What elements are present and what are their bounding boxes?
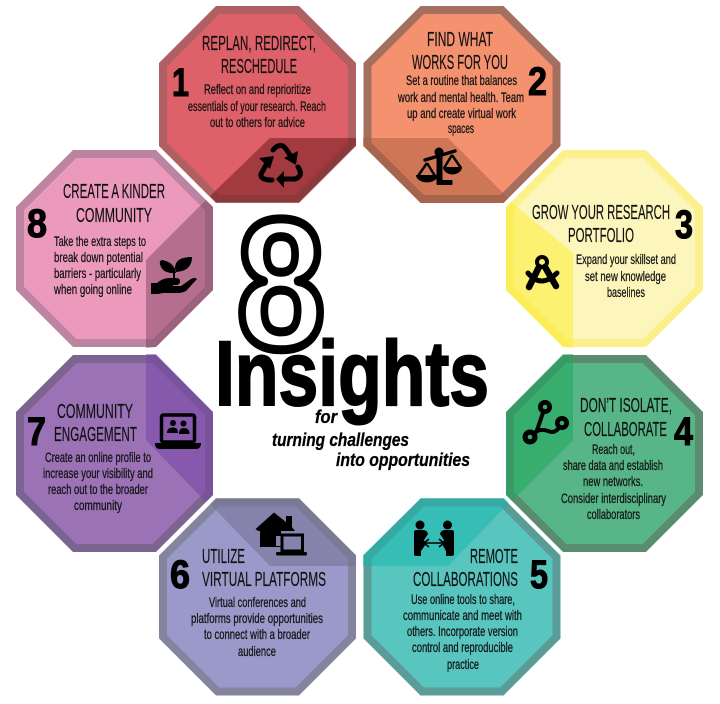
body text 8: Take the extra steps to (54, 233, 146, 249)
panel: 2 find what works for you (363, 6, 560, 203)
icon: recycle arrows (259, 146, 300, 188)
heading 2 (412, 29, 508, 74)
heading 2: WORKS FOR YOU (412, 52, 508, 74)
body text 8: break down potential (54, 249, 143, 265)
body text 7: increase your visibility and (43, 465, 153, 481)
body text 5: control and reproducible (412, 639, 513, 655)
icon: balance scales (416, 148, 462, 185)
subtitle: into opportunities (336, 450, 470, 470)
title: big outlined 8: 8 (237, 182, 325, 388)
body text 5: Use online tools to share, (411, 591, 515, 607)
icon: laptop with people (155, 415, 201, 449)
icon: drawing compass (528, 257, 557, 287)
heading 6: UTILIZE (202, 546, 245, 568)
heading 7: COMMUNITY (57, 401, 133, 423)
heading 4 (580, 395, 672, 441)
body text 6: Virtual conferences and (209, 594, 306, 610)
body text 2: work and mental health. Team (397, 89, 524, 105)
subtitle: turning challenges (272, 430, 409, 450)
icon: house and laptop (256, 512, 307, 556)
body text 4: collaborators (587, 506, 640, 522)
body text 4: Consider interdisciplinary (561, 490, 666, 506)
body text 5 (403, 591, 522, 672)
panel: 1 replan, redirect, reschedule (159, 6, 356, 203)
heading 5: REMOTE (470, 546, 518, 568)
heading 8: COMMUNITY (76, 205, 152, 227)
body text 8: when going online (53, 281, 132, 297)
panel: 3 grow your research portfolio (506, 150, 703, 348)
body text 2: up and create virtual work (407, 105, 517, 121)
body text 3 (576, 251, 676, 300)
icon: hand holding plant (151, 257, 197, 294)
heading 1: RESCHEDULE (221, 56, 297, 78)
subtitle (272, 407, 470, 470)
body text 2 (397, 72, 524, 136)
title: Insights: Insights (215, 323, 489, 425)
body text 6: audience (238, 643, 276, 659)
number 4: 4 (674, 410, 694, 454)
number 5: 5 (530, 553, 548, 597)
body text 1: essentials of your research. Reach (188, 98, 326, 114)
body text 3: set new knowledge (585, 268, 666, 284)
body text 8 (53, 233, 146, 297)
heading 3 (532, 202, 670, 247)
panel: 4 don't isolate, collaborate (506, 354, 703, 552)
body text 6 (191, 594, 323, 659)
heading 5: COLLABORATIONS (413, 569, 518, 591)
heading 5 (413, 546, 518, 591)
body text 1 (188, 81, 326, 130)
body text 7: community (74, 497, 122, 513)
body text 1: out to others for advice (210, 114, 305, 130)
body text 4: new networks. (583, 473, 643, 489)
heading 6: VIRTUAL PLATFORMS (202, 569, 326, 591)
heading 1 (202, 33, 316, 78)
body text 4 (561, 441, 666, 522)
number 1: 1 (172, 61, 189, 105)
body text 5: communicate and meet with (403, 607, 522, 623)
body text 6: platforms provide opportunities (191, 610, 323, 626)
heading 8 (63, 181, 165, 227)
body text 8: barriers - particularly (54, 265, 141, 281)
panel: 6 utilize virtual platforms (159, 498, 356, 696)
panel: 7 community engagement (16, 354, 213, 552)
subtitle: for (315, 407, 338, 427)
body text 3: baselines (607, 284, 645, 300)
number 7: 7 (27, 410, 46, 454)
body text 4: share data and establish (563, 457, 663, 473)
number 2: 2 (528, 60, 547, 104)
heading 3: PORTFOLIO (568, 225, 634, 247)
body text 5: practice (447, 656, 479, 672)
number 8: 8 (27, 202, 47, 246)
heading 2: FIND WHAT (427, 29, 493, 51)
number 6: 6 (170, 553, 190, 597)
body text 6: to connect with a broader (204, 626, 310, 642)
number 3: 3 (675, 203, 693, 247)
body text 4: Reach out, (592, 441, 635, 457)
body text 2: Set a routine that balances (406, 72, 517, 88)
heading 7 (54, 401, 137, 446)
body text 5: others. Incorporate version (407, 623, 518, 639)
body text 7: Create an online profile to (45, 449, 151, 465)
icon: connected nodes (522, 400, 569, 444)
body text 1: Reflect on and reprioritize (204, 81, 311, 97)
heading 8: CREATE A KINDER (63, 181, 165, 203)
icon: two people with double arrow (414, 520, 454, 556)
panel: 5 remote collaborations (363, 498, 560, 696)
heading 1: REPLAN, REDIRECT, (202, 33, 316, 55)
body text 7 (43, 449, 153, 513)
body text 2: spaces (448, 120, 474, 136)
heading 6 (202, 546, 326, 591)
heading 7: ENGAGEMENT (54, 424, 137, 446)
panel: 8 create a kinder community (16, 150, 213, 348)
body text 7: reach out to the broader (48, 481, 148, 497)
